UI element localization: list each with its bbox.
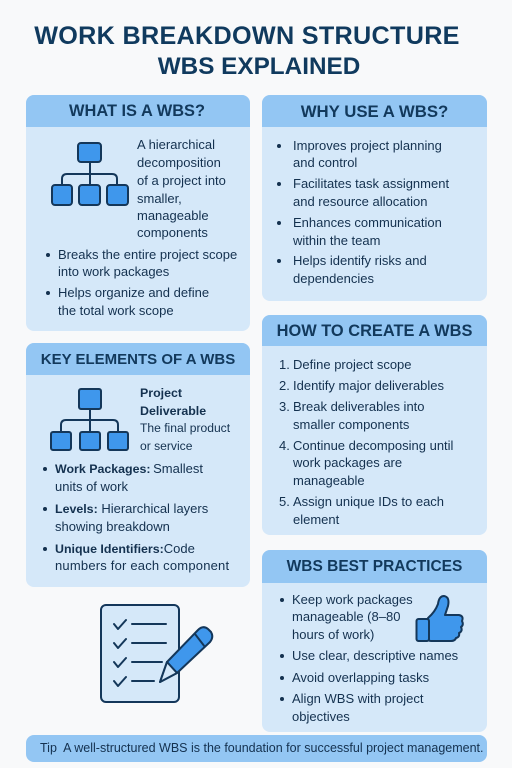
bullet list: Breaks the entire project scope (58, 247, 237, 262)
bullet list (43, 461, 229, 573)
numbered steps: manageable (293, 473, 365, 488)
bullet list: and resource allocation (293, 194, 427, 209)
bullet list: manageable (8–80 (292, 609, 400, 624)
bullet list: dependencies (293, 271, 374, 286)
numbered steps: Assign unique IDs to each (293, 494, 444, 509)
description text (137, 137, 226, 240)
description text: A hierarchical (137, 137, 215, 152)
bullet list: Improves project planning (293, 138, 442, 153)
bullet list: hours of work) (292, 627, 374, 642)
heading: best practices (262, 550, 487, 583)
numbered steps: 4. (279, 438, 290, 453)
numbered steps: 1. (279, 357, 290, 372)
description text: of a project into (137, 173, 226, 188)
icon: hierarchy chart (51, 142, 129, 206)
bullet list: Helps identify risks and (293, 253, 427, 268)
tip bar (26, 735, 487, 762)
description text: decomposition (137, 155, 221, 170)
bullet list: Facilitates task assignment (293, 176, 449, 191)
heading: what is a WBS: WHAT IS A WBS? (69, 102, 205, 120)
bullet list (280, 592, 458, 724)
bullet list: and control (293, 155, 357, 170)
bullet list: units of work (55, 479, 128, 494)
description text: manageable (137, 208, 209, 223)
numbered steps: 3. (279, 399, 290, 414)
panel: WBS best practices (262, 550, 487, 732)
numbered steps: Identify major deliverables (293, 378, 444, 393)
heading: key elements (26, 343, 250, 375)
bullet list: the total work scope (58, 303, 174, 318)
bullet list: within the team (293, 233, 380, 248)
panel: what is a WBS (26, 95, 250, 331)
panel: how to create a WBS (262, 315, 487, 535)
bullet list (277, 138, 449, 286)
icon: hierarchy chart (50, 388, 129, 451)
project deliverable text: The final product (140, 421, 230, 435)
numbered steps: Continue decomposing until (293, 438, 453, 453)
heading: how to create: HOW TO CREATE A WBS (277, 322, 472, 340)
numbered steps: Break deliverables into (293, 399, 425, 414)
bullet list (46, 247, 237, 318)
description text: components (137, 225, 208, 240)
numbered steps: work packages are (293, 455, 402, 470)
bullet list: into work packages (58, 264, 169, 279)
bullet list: showing breakdown (55, 519, 170, 534)
heading: why use a WBS: WHY USE A WBS? (301, 102, 448, 121)
description text: smaller, (137, 191, 182, 206)
bullet list: Unique Identifiers:Code (55, 541, 195, 556)
numbered steps (279, 357, 453, 527)
project deliverable text: Project (140, 386, 182, 400)
subtitle: WBS EXPLAINED (158, 53, 360, 80)
heading: best practices: WBS BEST PRACTICES (287, 558, 462, 575)
heading: how to create (262, 315, 487, 346)
numbered steps: 2. (279, 378, 290, 393)
bullet list: numbers for each component (55, 558, 229, 573)
tip bar: Tip A well-structured WBS is the foundation for successful project management. (40, 741, 484, 755)
panel: key elements of a WBS (26, 343, 250, 587)
icon: thumbs up (416, 595, 464, 642)
project deliverable text (140, 386, 230, 453)
numbered steps: Define project scope (293, 357, 412, 372)
bullet list: Use clear, descriptive names (292, 648, 458, 663)
bullet list: Helps organize and define (58, 285, 209, 300)
numbered steps: element (293, 512, 339, 527)
bullet list: Enhances communication (293, 215, 442, 230)
panel: why use a WBS (262, 95, 487, 301)
numbered steps: 5. (279, 494, 290, 509)
heading: key elements: KEY ELEMENTS OF A WBS (41, 351, 235, 368)
bullet list: Keep work packages (292, 592, 413, 607)
heading: what is a WBS (26, 95, 250, 127)
project deliverable text: or service (140, 439, 192, 453)
project deliverable text: Deliverable (140, 404, 206, 418)
bullet list: Levels: Hierarchical layers (55, 501, 208, 516)
bullet list: objectives (292, 709, 350, 724)
bullet list: Avoid overlapping tasks (292, 670, 429, 685)
title: WORK BREAKDOWN STRUCTURE (34, 22, 460, 50)
numbered steps: smaller components (293, 417, 409, 432)
heading: why use a WBS (262, 95, 487, 127)
bullet list: Work Packages: Smallest (55, 461, 203, 476)
bullet list: Align WBS with project (292, 691, 424, 706)
